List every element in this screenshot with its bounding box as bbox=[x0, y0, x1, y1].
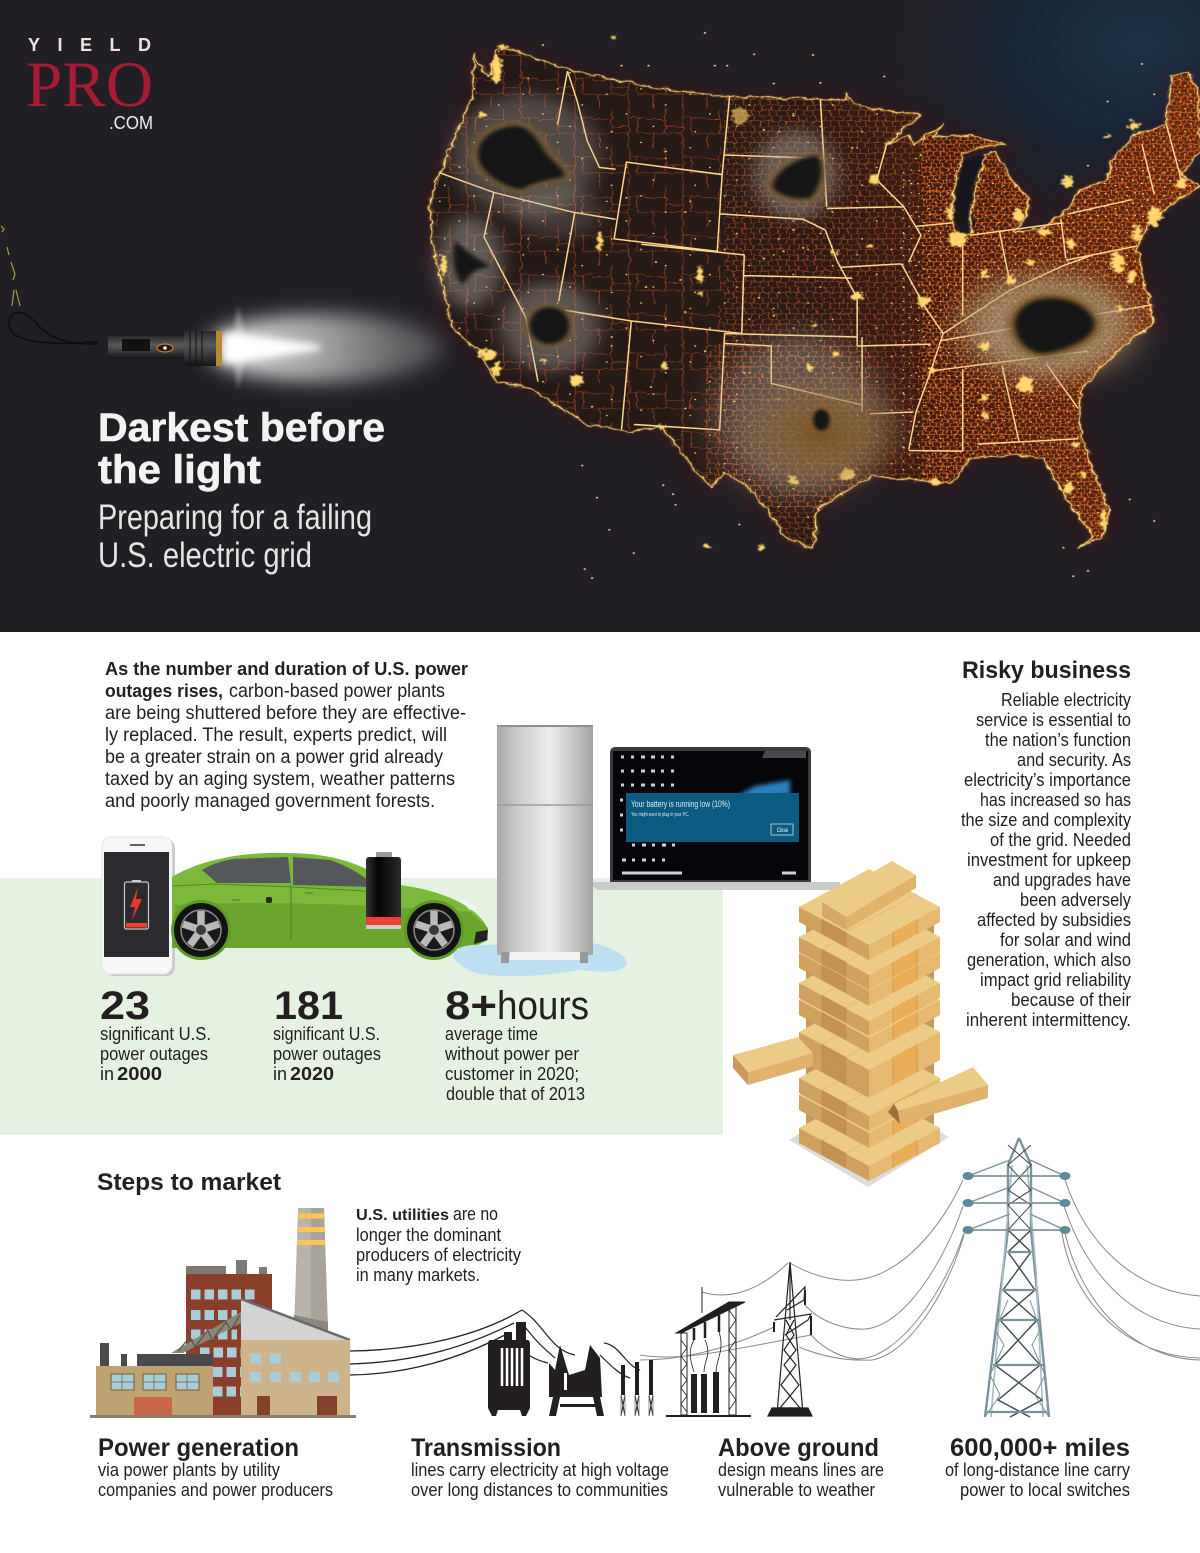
risky business body: impact grid reliability bbox=[980, 970, 1131, 990]
risky business body: affected by subsidies bbox=[977, 910, 1131, 930]
low building bbox=[96, 1343, 213, 1416]
haze: oklahoma texas bbox=[715, 333, 882, 498]
risky business body bbox=[961, 690, 1131, 1030]
glowing coastline bbox=[430, 48, 1200, 548]
step: above ground: Above ground bbox=[718, 1434, 879, 1462]
hero panel bbox=[0, 0, 1200, 632]
stat: 8+ hours: 8+ bbox=[445, 984, 497, 1028]
flashlight beam bbox=[207, 305, 443, 390]
risky business body: inherent intermittency. bbox=[966, 1010, 1131, 1030]
subtitle: Preparing for a failing bbox=[98, 498, 372, 537]
stat: 23 outages in 2000 bbox=[100, 984, 211, 1084]
haze: arizona bbox=[501, 282, 599, 371]
intro text: be a greater strain on a power grid already bbox=[105, 747, 443, 768]
icon: smartphone low battery bbox=[102, 837, 175, 976]
logo: YIELD bbox=[28, 35, 151, 55]
risky business body: and upgrades have bbox=[993, 870, 1131, 890]
risky business body: the size and complexity bbox=[961, 810, 1131, 830]
city lights bbox=[441, 35, 1187, 551]
haze: california bbox=[437, 216, 501, 308]
scattered small lights bbox=[543, 33, 1154, 578]
step: 600,000+ miles: power to local switches bbox=[960, 1480, 1130, 1500]
battery warning dialog: You might want to plug in your PC. bbox=[631, 812, 689, 818]
title: the light bbox=[98, 448, 261, 492]
blackout: texas bbox=[728, 369, 915, 498]
utilities callout: in many markets. bbox=[356, 1265, 480, 1285]
ocean at top right bbox=[890, 0, 1200, 225]
stat: 23 outages in 2000: significant U.S. bbox=[100, 1024, 211, 1044]
intro text: outages rises, bbox=[105, 680, 223, 701]
US night lights map bbox=[420, 23, 1200, 578]
step: above ground: design means lines are bbox=[718, 1460, 884, 1480]
stat: 181 outages in 2020: 181 bbox=[274, 984, 343, 1028]
blackout: appalachia bbox=[1009, 294, 1100, 357]
step: above ground: vulnerable to weather bbox=[718, 1480, 875, 1500]
step: power generation: companies and power producers bbox=[98, 1480, 333, 1500]
icon: melting refrigerator bbox=[453, 725, 627, 976]
icon: black pylon bbox=[768, 1262, 812, 1416]
risky business body: electricity’s importance bbox=[964, 770, 1131, 790]
stat: 8+ hours: customer in 2020; bbox=[445, 1064, 579, 1084]
red glow around coast bbox=[430, 48, 1200, 548]
icon: jenga tower bbox=[733, 861, 988, 1187]
county lines bbox=[430, 48, 1200, 548]
risky business body: been adversely bbox=[1020, 890, 1131, 910]
smokestack bbox=[294, 1208, 328, 1335]
blackout: northwest bbox=[472, 121, 570, 193]
stat: 181 outages in 2020: 2020 bbox=[290, 1064, 334, 1084]
utilities callout: producers of electricity bbox=[356, 1245, 521, 1265]
utilities callout: longer the dominant bbox=[356, 1225, 501, 1245]
top loose block bbox=[822, 861, 916, 930]
pulled block left bbox=[733, 1037, 813, 1085]
stat: 23 outages in 2000: 2000 bbox=[117, 1064, 162, 1084]
step: above ground bbox=[718, 1434, 884, 1500]
blackout: california bbox=[454, 241, 490, 285]
intro text bbox=[105, 658, 468, 812]
step: 600,000+ miles: of long-distance line carry bbox=[945, 1460, 1130, 1480]
risky business body: investment for upkeep bbox=[967, 850, 1131, 870]
stat: 23 outages in 2000: power outages bbox=[100, 1044, 208, 1064]
utilities callout: U.S. utilities bbox=[356, 1207, 449, 1224]
title bbox=[98, 406, 385, 492]
risky business body: for solar and wind bbox=[1000, 930, 1131, 950]
risky business body: generation, which also bbox=[967, 950, 1131, 970]
icon: small switch towers bbox=[621, 1360, 653, 1416]
haze: appalachia bbox=[963, 275, 1135, 378]
icon: transformer bbox=[488, 1322, 530, 1416]
risky business body: because of their bbox=[1011, 990, 1131, 1010]
step: transmission bbox=[411, 1434, 669, 1500]
step: power generation: Power generation bbox=[98, 1434, 299, 1462]
risky business body: the nation’s function bbox=[985, 730, 1131, 750]
flashlight bbox=[9, 305, 443, 390]
haze: idaho band bbox=[513, 187, 602, 237]
front wheel bbox=[404, 900, 464, 960]
stat: 181 outages in 2020 bbox=[273, 984, 381, 1084]
thin grey lines bbox=[640, 1180, 1200, 1360]
power lines bbox=[350, 1180, 1200, 1378]
main building bbox=[241, 1299, 350, 1416]
risky business body: of the grid. Needed bbox=[990, 830, 1131, 850]
map land fill bbox=[430, 48, 1200, 548]
stat: 8+ hours: double that of 2013 bbox=[446, 1084, 585, 1104]
stat: 23 outages in 2000: in bbox=[100, 1064, 114, 1084]
step: power generation: via power plants by utility bbox=[98, 1460, 280, 1480]
stat: 8+ hours: hours bbox=[497, 984, 589, 1028]
risky business body: has increased so has bbox=[980, 790, 1131, 810]
stat: 8+ hours: without power per bbox=[444, 1044, 579, 1064]
lake michigan bbox=[954, 155, 985, 237]
utilities callout bbox=[356, 1204, 521, 1285]
car battery bbox=[366, 852, 401, 929]
icon: green car bbox=[171, 852, 488, 960]
risky business body: service is essential to bbox=[976, 710, 1131, 730]
blackout: arizona bbox=[525, 304, 574, 347]
rear wheel bbox=[171, 900, 231, 960]
step: power generation bbox=[98, 1434, 333, 1500]
step: transmission: lines carry electricity at high voltage bbox=[411, 1460, 669, 1480]
step: transmission: Transmission bbox=[411, 1434, 561, 1462]
state borders bbox=[440, 71, 1181, 451]
intro text: are being shuttered before they are effective- bbox=[105, 703, 466, 724]
stat: 8+ hours: average time bbox=[445, 1024, 538, 1044]
pulled block right bbox=[888, 1067, 988, 1124]
stat: 8+ hours bbox=[444, 984, 589, 1104]
subtitle: U.S. electric grid bbox=[98, 536, 312, 575]
risky business body: Reliable electricity bbox=[1001, 690, 1131, 710]
icon: power plant bbox=[90, 1208, 356, 1418]
logo: PRO bbox=[26, 49, 153, 121]
stat: 181 outages in 2020: in bbox=[273, 1064, 287, 1084]
intro text: taxed by an aging system, weather patterns bbox=[105, 769, 455, 790]
title: Darkest before bbox=[98, 406, 385, 450]
icon: large grey pylon bbox=[962, 1138, 1070, 1417]
steps to market heading: Steps to market bbox=[97, 1169, 281, 1196]
intro text: ly replaced. The result, experts predict, will bbox=[105, 725, 447, 746]
blackout: dakota bbox=[767, 152, 826, 202]
risky business sidebar bbox=[961, 657, 1131, 1030]
intro text: As the number and duration of U.S. power bbox=[105, 658, 468, 679]
green stats panel bbox=[0, 878, 723, 1135]
step: transmission: over long distances to communities bbox=[411, 1480, 668, 1500]
battery warning dialog: Your battery is running low (10%) bbox=[631, 799, 730, 809]
icon: substation gantry bbox=[666, 1287, 751, 1417]
risky business heading: Risky business bbox=[962, 657, 1131, 684]
icon: laptop low battery bbox=[592, 747, 840, 890]
logo: .COM bbox=[109, 113, 153, 133]
stat: 23 outages in 2000: 23 bbox=[100, 984, 150, 1028]
tower base shadow bbox=[789, 1090, 949, 1187]
intro text: and poorly managed government forests. bbox=[105, 791, 435, 812]
step: 600,000+ miles: 600,000+ miles bbox=[950, 1434, 1130, 1462]
step: 600,000+ miles bbox=[945, 1434, 1130, 1500]
subtitle bbox=[98, 498, 372, 575]
haze: dakota bbox=[754, 130, 838, 219]
risky business body: and security. As bbox=[1017, 750, 1131, 770]
conveyor bbox=[171, 1312, 241, 1353]
icon: substation transformer bbox=[549, 1345, 604, 1416]
factory lines bbox=[350, 1310, 522, 1375]
intro text: carbon-based power plants bbox=[229, 681, 445, 702]
hero dark background bbox=[0, 0, 1200, 632]
stat: 181 outages in 2020: significant U.S. bbox=[273, 1024, 380, 1044]
insulators bbox=[962, 1172, 1070, 1234]
stray colored outlines bbox=[1, 226, 20, 306]
car windows bbox=[202, 857, 376, 887]
battery warning dialog bbox=[626, 793, 799, 842]
haze: northwest bbox=[452, 94, 599, 216]
tower core bbox=[806, 907, 934, 1165]
brick tower bbox=[186, 1260, 272, 1416]
battery warning dialog: Close bbox=[777, 828, 788, 834]
utilities callout: are no bbox=[453, 1204, 498, 1224]
stat: 181 outages in 2020: power outages bbox=[273, 1044, 381, 1064]
